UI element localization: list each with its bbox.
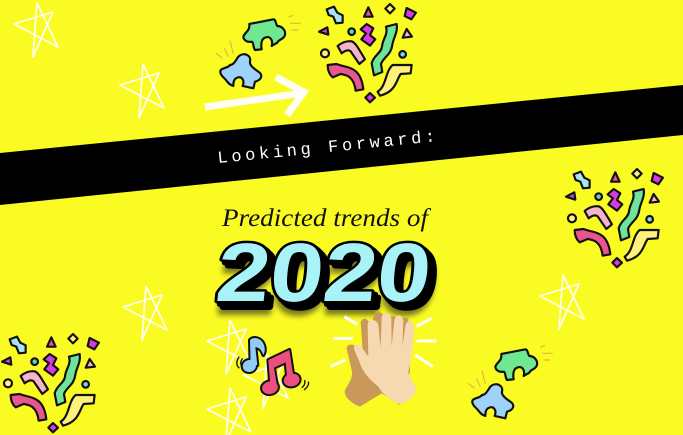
icon: confetti bottom left xyxy=(2,334,99,432)
year 2020: 2020 xyxy=(216,237,440,330)
year 2020: 2020 xyxy=(212,226,436,319)
black banner xyxy=(0,85,683,205)
year 2020: 2020 xyxy=(212,226,436,319)
banner heading: Looking Forward: xyxy=(217,128,440,169)
icon: confetti right xyxy=(566,169,663,267)
star upper middle xyxy=(120,64,164,118)
icon: top puzzle pieces xyxy=(216,15,301,88)
star behind notes xyxy=(244,354,288,408)
year 2020: 2020 xyxy=(218,232,442,325)
year 2020: 2020 xyxy=(215,229,439,322)
icon: bottom puzzle pieces xyxy=(468,345,553,418)
star bottom middle B xyxy=(207,388,251,435)
star right xyxy=(540,275,584,329)
icon: high five hands xyxy=(331,312,437,407)
icon: confetti top xyxy=(319,4,416,102)
subtitle: Predicted trends of xyxy=(221,205,431,232)
star top left xyxy=(14,3,58,57)
star lower left xyxy=(123,286,167,340)
star bottom middle A xyxy=(207,320,251,374)
icon: music notes xyxy=(237,338,309,396)
arrow xyxy=(205,77,304,115)
